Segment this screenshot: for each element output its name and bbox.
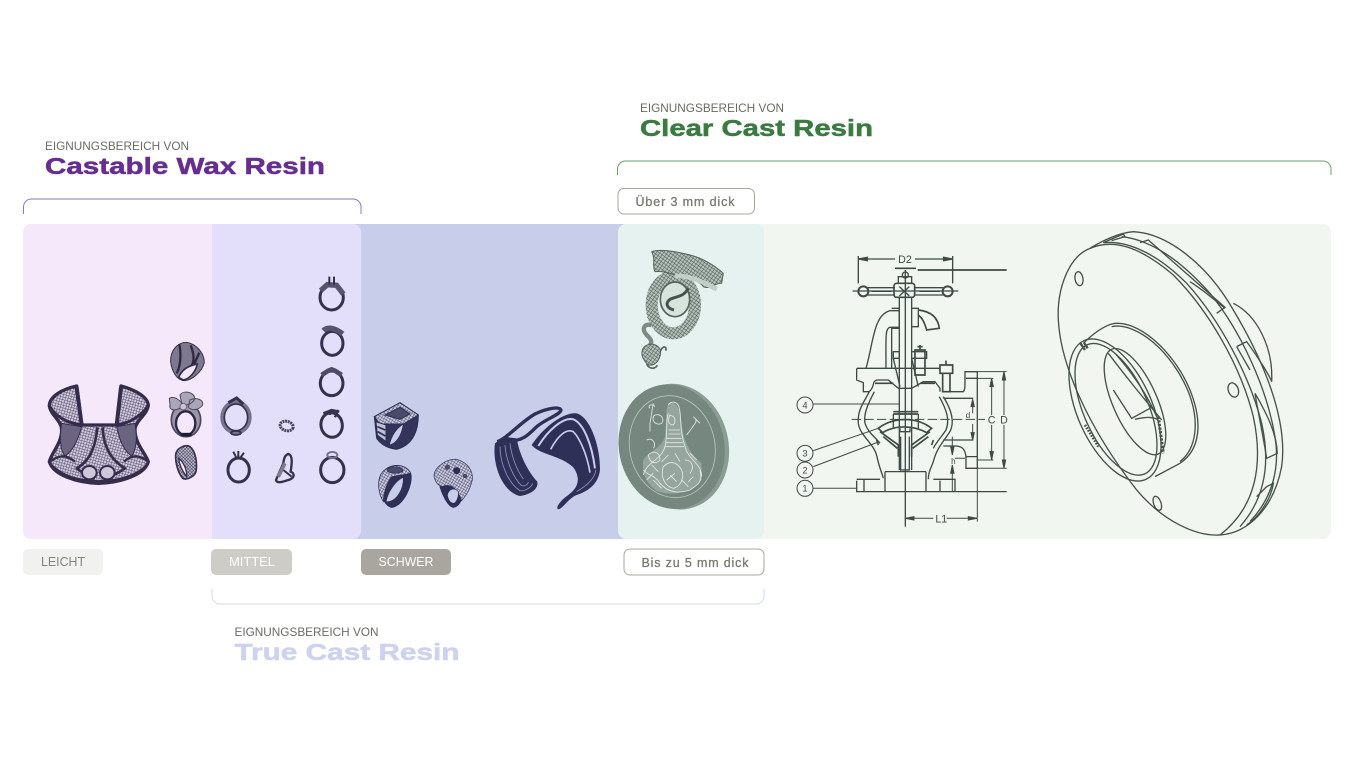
label: MITTEL (211, 549, 292, 575)
label: LEICHT (23, 549, 103, 575)
label: LEICHT: LEICHT (41, 555, 85, 569)
dimension labels: 2 (802, 465, 808, 475)
icon: pavé signet ring (heavy) (374, 403, 418, 449)
heading: True Cast Resin (234, 625, 460, 665)
label: Bis zu 5 mm dick: Bis zu 5 mm dick (642, 556, 749, 570)
icon: dragon sculpture (642, 250, 723, 368)
stem and yoke (866, 270, 953, 527)
handwheel and D2 dimension (853, 256, 1007, 297)
dimension labels: L1 (935, 514, 947, 526)
heading: Castable Wax Resin (45, 139, 325, 179)
icon: dome ring (171, 342, 204, 381)
dimension labels: D2 (898, 254, 912, 266)
label: MITTEL: MITTEL (229, 555, 275, 569)
heading: Clear Cast Resin (640, 101, 873, 141)
diagram: impeller line drawing (1050, 232, 1283, 535)
dimension labels: C (988, 415, 996, 427)
icon: engraved guanyin medallion (607, 374, 741, 520)
label: SCHWER: SCHWER (378, 555, 434, 569)
icon: engraved ring (heavy) (379, 466, 411, 507)
icon: wave cuff bracelet (heavy) (494, 408, 600, 509)
dimension labels: 1 (802, 484, 808, 494)
dimension labels: 3 (802, 449, 808, 459)
icon: ornate cocktail ring (heavy) (434, 459, 472, 507)
icon: narrow mesh ring (176, 446, 196, 479)
diagram: valve technical drawing (797, 252, 1009, 527)
icon: solitaire ring cluster (medium) (222, 369, 344, 483)
icon: two top rings (medium) (320, 277, 343, 355)
bracket: True Cast Resin range (212, 589, 764, 604)
heading: Castable Wax Resin: EIGNUNGSBEREICH VON (45, 139, 189, 153)
heading: Clear Cast Resin: EIGNUNGSBEREICH VON (640, 101, 784, 115)
label: Über 3 mm dick (618, 188, 754, 214)
label: Über 3 mm dick: Über 3 mm dick (636, 195, 735, 209)
dimension labels: D (1000, 415, 1008, 427)
heading: Castable Wax Resin: Castable Wax Resin (45, 153, 325, 179)
dimension labels (802, 252, 1009, 526)
flange and body (857, 368, 1007, 492)
label: SCHWER (361, 549, 451, 575)
icon: flower ring (169, 392, 203, 437)
heading: True Cast Resin: EIGNUNGSBEREICH VON (234, 625, 378, 639)
heading: Clear Cast Resin: Clear Cast Resin (640, 115, 873, 141)
bracket: Clear Cast Resin range (618, 161, 1331, 175)
bracket: Castable Wax Resin range (24, 199, 361, 214)
panel: suitability band background (23, 224, 1331, 539)
dimension labels: 4 (802, 400, 808, 410)
icon: mesh cuff bracelet (49, 386, 148, 483)
dimension lines (797, 372, 1007, 522)
heading: True Cast Resin: True Cast Resin (234, 639, 460, 665)
label: Bis zu 5 mm dick (624, 549, 764, 575)
dimension labels: h (951, 457, 956, 466)
dimension labels: d (966, 411, 970, 420)
